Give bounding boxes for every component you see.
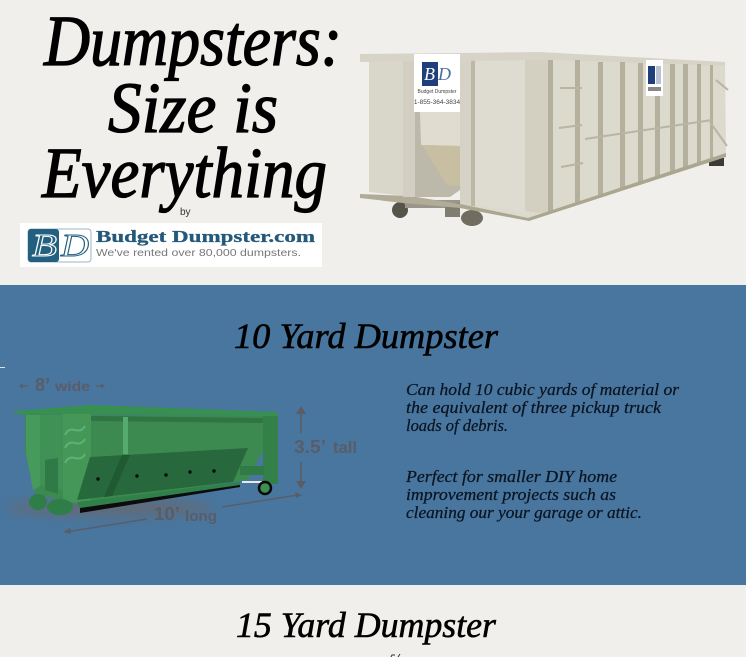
description text: improvement projects such as <box>406 485 616 504</box>
dumpster label large: B <box>424 64 435 84</box>
logo: Budget Dumpster.com: B <box>32 227 57 263</box>
lower dark panel <box>77 448 248 500</box>
dumpster label large: 1-855-364-3834 <box>414 99 461 106</box>
description text: loads of debris. <box>406 416 508 435</box>
dumpster illustration: green <box>5 405 278 516</box>
dimension: 3.5' tall: 3.5’ <box>294 437 326 457</box>
dumpster left end face <box>369 60 415 197</box>
logo: Budget Dumpster.com: D <box>60 227 89 263</box>
dumpster label large: Budget Dumpster <box>418 89 457 95</box>
dumpster label small <box>646 60 663 96</box>
dumpster label large: D <box>437 64 451 84</box>
heading: 15 Yard Dumpster: 15 Yard Dumpster <box>236 605 497 645</box>
vertical ribs <box>548 60 713 213</box>
description text: Perfect for smaller DIY home <box>405 467 617 486</box>
bottom rail <box>77 482 240 508</box>
description text: the equivalent of three pickup truck <box>406 398 661 417</box>
bottom frame left <box>360 194 460 208</box>
logo: Budget Dumpster.com: We've rented over 80,000 dumpsters. <box>96 247 301 259</box>
title: Everything <box>41 133 327 213</box>
panel: 10 yard dumpster <box>0 285 746 585</box>
title: Size is <box>108 68 278 148</box>
top rim <box>360 52 725 66</box>
dumpster front wall <box>460 53 726 220</box>
heading: 10 Yard Dumpster: 10 Yard Dumpster <box>234 316 499 356</box>
photo: large beige roll-off dumpster <box>360 52 728 226</box>
body <box>25 414 263 504</box>
dimension: 8' wide: wide <box>54 378 90 394</box>
dimension: 3.5' tall <box>294 406 357 489</box>
dimension: 10' long: 10’ <box>154 504 180 524</box>
wheels <box>29 494 47 510</box>
title: Dumpsters: <box>43 1 342 81</box>
dimension: 8' wide: 8’ <box>35 375 50 395</box>
description text <box>405 380 679 522</box>
dumpster label large <box>414 54 461 112</box>
dimension: 10' long <box>63 492 302 534</box>
dimension: 8' wide <box>20 375 104 395</box>
description text: Can hold 10 cubic yards of material or <box>406 380 679 399</box>
dumpster wheels <box>392 158 724 226</box>
right end <box>263 416 278 484</box>
dimension: 10' long: long <box>185 508 217 525</box>
holes <box>96 469 216 481</box>
hopper opening <box>415 112 460 197</box>
logo: Budget Dumpster.com: Budget Dumpster.com <box>96 227 315 246</box>
rim <box>15 405 278 416</box>
by label: by <box>180 207 191 218</box>
hooks <box>65 426 85 463</box>
title <box>41 1 342 213</box>
description text: cleaning our your garage or attic. <box>406 503 642 522</box>
dimension: 3.5' tall: tall <box>333 438 357 457</box>
logo: Budget Dumpster.com <box>20 223 322 267</box>
